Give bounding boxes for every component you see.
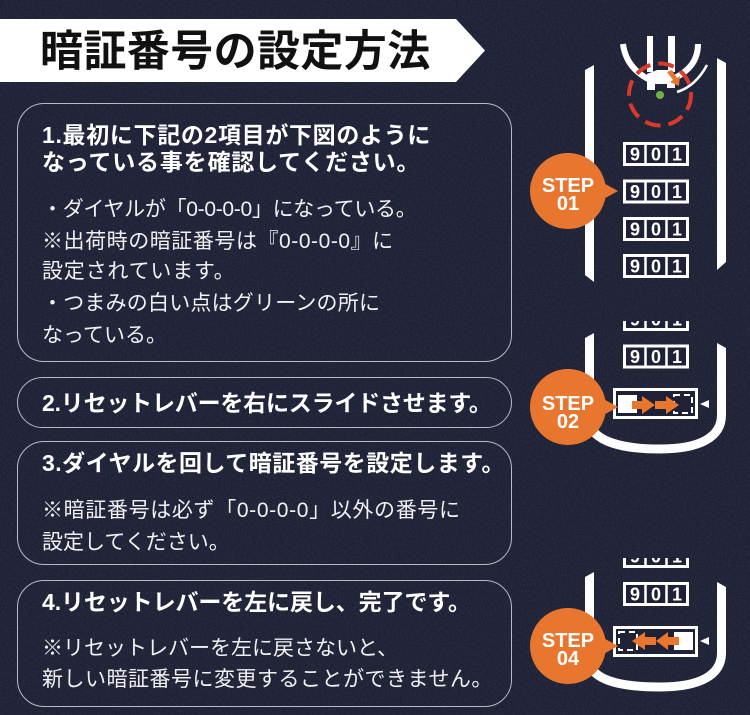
lock body left edge [585, 65, 594, 282]
orange arrows right [632, 396, 679, 414]
dashed target [674, 395, 692, 413]
dial row 4 [624, 255, 688, 277]
illustration: step 4 lock [530, 545, 726, 687]
knob prongs [647, 36, 675, 72]
text: factory code note second line: 設定されています。 [42, 260, 235, 283]
illustration: step 2 lock [530, 308, 726, 449]
text: factory code note: ※出荷時の暗証番号は『0-0-0-0』に [42, 230, 394, 253]
dial row 3 [624, 218, 688, 240]
lock body top-left edge [585, 572, 594, 600]
small triangle marker [700, 637, 709, 645]
dashed red circle [629, 64, 691, 126]
green dot [656, 91, 664, 99]
top dial cut off [623, 558, 689, 568]
heading: step 1: 1.最初に下記の2項目が下図のように [42, 122, 431, 148]
text: warning second line: 新しい暗証番号に変更することができません。 [42, 668, 493, 691]
orange arrow [667, 70, 680, 86]
heading: step 3: 3.ダイヤルを回して暗証番号を設定します。 [42, 450, 505, 476]
lock body outline [590, 360, 722, 449]
text: knob dot condition second line: なっている。 [42, 324, 167, 347]
step 01 badge [530, 153, 618, 229]
dial row [624, 346, 688, 368]
slider [674, 632, 693, 650]
heading: step 2: 2.リセットレバーを右にスライドさせます。 [42, 390, 492, 416]
text: knob dot condition: ・つまみの白い点はグリーンの所に [42, 292, 380, 315]
lever slot [614, 390, 696, 418]
step 04 badge: 04 [557, 648, 580, 670]
title banner [0, 19, 485, 82]
orange arrows left [632, 632, 679, 650]
thin pointer line [677, 65, 707, 92]
dial row [624, 583, 688, 605]
lock body top-right edge [717, 343, 726, 372]
panel: step 3 instructions [17, 441, 512, 565]
text: warning: ※リセットレバーを左に戻さないと、 [42, 637, 398, 660]
lock body top-right edge [717, 582, 726, 610]
step 01 badge: 01 [557, 193, 579, 215]
dial row 2 [624, 180, 688, 202]
dial row 1 [624, 143, 688, 165]
slider [618, 395, 637, 413]
step 04 badge [530, 608, 618, 684]
panel: step 2 instructions [17, 377, 512, 428]
lock body right edge [717, 58, 726, 270]
step 01 badge: STEP [542, 175, 594, 197]
lever slot [614, 628, 696, 656]
panel: step 4 instructions [17, 580, 512, 707]
heading: step 4: 4.リセットレバーを左に戻し、完了です。 [42, 589, 471, 615]
heading: step 1 second line: なっている事を確認してください。 [42, 149, 420, 175]
illustrations [530, 36, 726, 692]
lock body outline [590, 598, 722, 687]
step 02 badge: STEP [542, 393, 594, 415]
text: code restriction second line: 設定してください。 [42, 531, 230, 554]
title banner: 暗証番号の設定方法 [40, 28, 431, 76]
small triangle marker [700, 400, 709, 408]
step 02 badge [530, 369, 618, 445]
step 02 badge: 02 [557, 411, 579, 433]
lock body top-left edge [585, 333, 594, 362]
text: code restriction: ※暗証番号は必ず「0-0-0-0」以外の番号に [42, 499, 461, 522]
knob [647, 70, 675, 90]
dashed target [619, 632, 637, 650]
text: dial condition: ・ダイヤルが「0-0-0-0」になっている。 [42, 198, 416, 221]
panel: step 1 instructions [17, 103, 512, 362]
knob arcs [623, 44, 698, 80]
top dial cut off [623, 321, 689, 331]
step 04 badge: STEP [542, 630, 594, 652]
illustration: step 1 lock [530, 36, 726, 282]
